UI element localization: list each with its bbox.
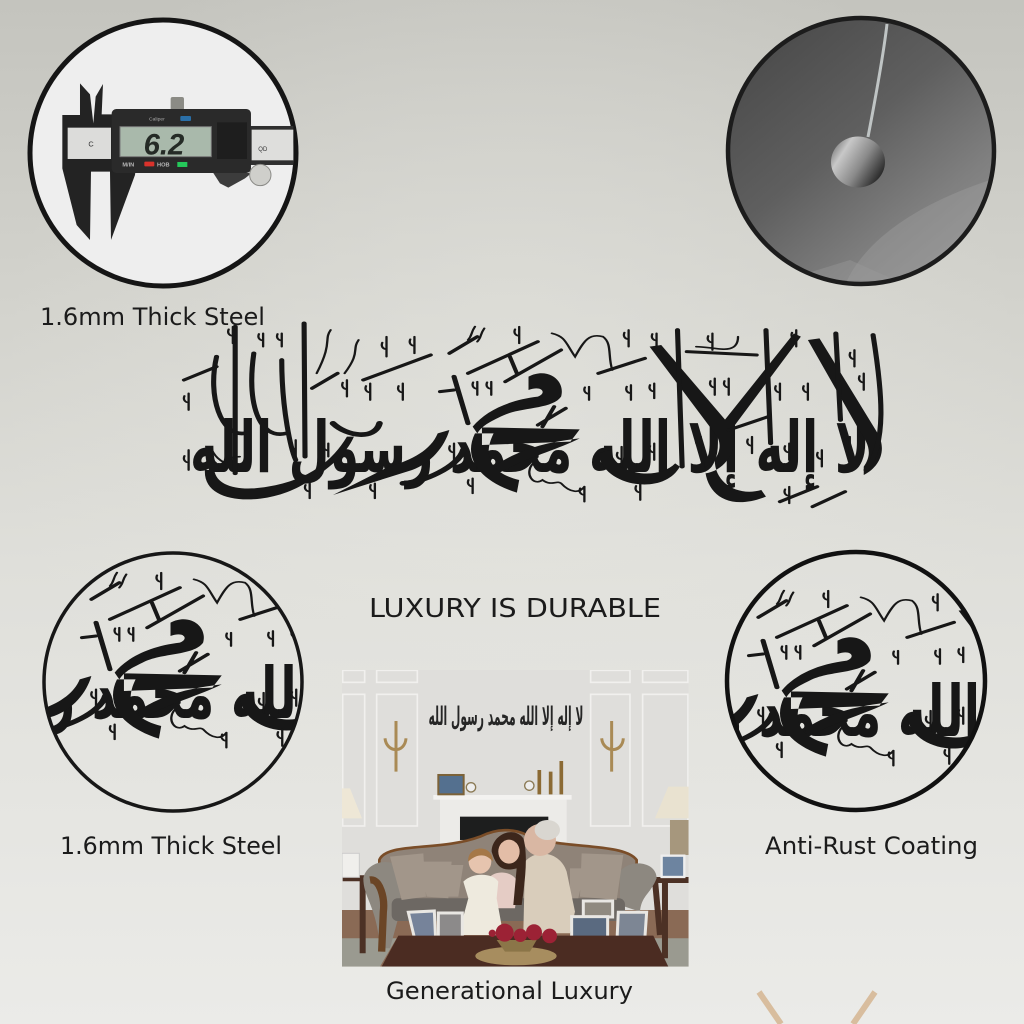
heading: LUXURY IS DURABLE: LUXURY IS DURABLE: [369, 594, 661, 624]
floor: [342, 910, 689, 967]
caliper jaws: [62, 83, 137, 240]
caliper buttons: Caliper: [149, 117, 165, 123]
caliper scale bar: [68, 126, 293, 165]
sofa: [363, 830, 657, 952]
label: Anti-Rust Coating: Anti-Rust Coating: [765, 832, 978, 860]
lamps and side tables: [342, 787, 689, 958]
icon: water drop on steel in circle: [728, 18, 994, 290]
photo frames: [406, 900, 648, 936]
circle: calligraphy close-up left: [42, 551, 304, 813]
label: 1.6mm Thick Steel (lower): 1.6mm Thick Steel: [60, 832, 282, 860]
circle: calligraphy close-up right: [724, 550, 988, 812]
label: Generational Luxury: Generational Luxury: [386, 977, 633, 1005]
caliper display: [120, 127, 211, 161]
wall panels: [343, 670, 688, 826]
caliper thumb wheel: [250, 164, 271, 186]
decorative wooden sticks: [759, 992, 875, 1024]
caliper scale bar: C: [88, 140, 94, 149]
caliper scale bar: QD: [258, 147, 268, 153]
mantel and fireplace: [433, 761, 572, 845]
icon: digital caliper in circle: [30, 20, 296, 286]
water stream: [868, 24, 887, 137]
caliper body: [112, 97, 252, 188]
main calligraphy wall art: لا إله إلا الله محمد رسول الله: [190, 406, 870, 490]
water droplet: [831, 136, 885, 188]
caliper buttons: HOB: [157, 162, 170, 168]
caliper buttons: M/IN: [122, 162, 134, 168]
photo: family in luxury living room: [342, 670, 689, 967]
miniature calligraphy: لا إله إلا الله محمد رسول الله: [428, 701, 583, 732]
coffee table and flowers: [382, 924, 668, 967]
label: 1.6mm Thick Steel (top): 1.6mm Thick Steel: [40, 303, 265, 331]
caliper display: 6.2: [144, 128, 185, 161]
caliper buttons: [122, 116, 191, 168]
wall sconces: [385, 721, 623, 772]
main calligraphy wall art: [184, 323, 882, 507]
family group: [458, 820, 575, 935]
